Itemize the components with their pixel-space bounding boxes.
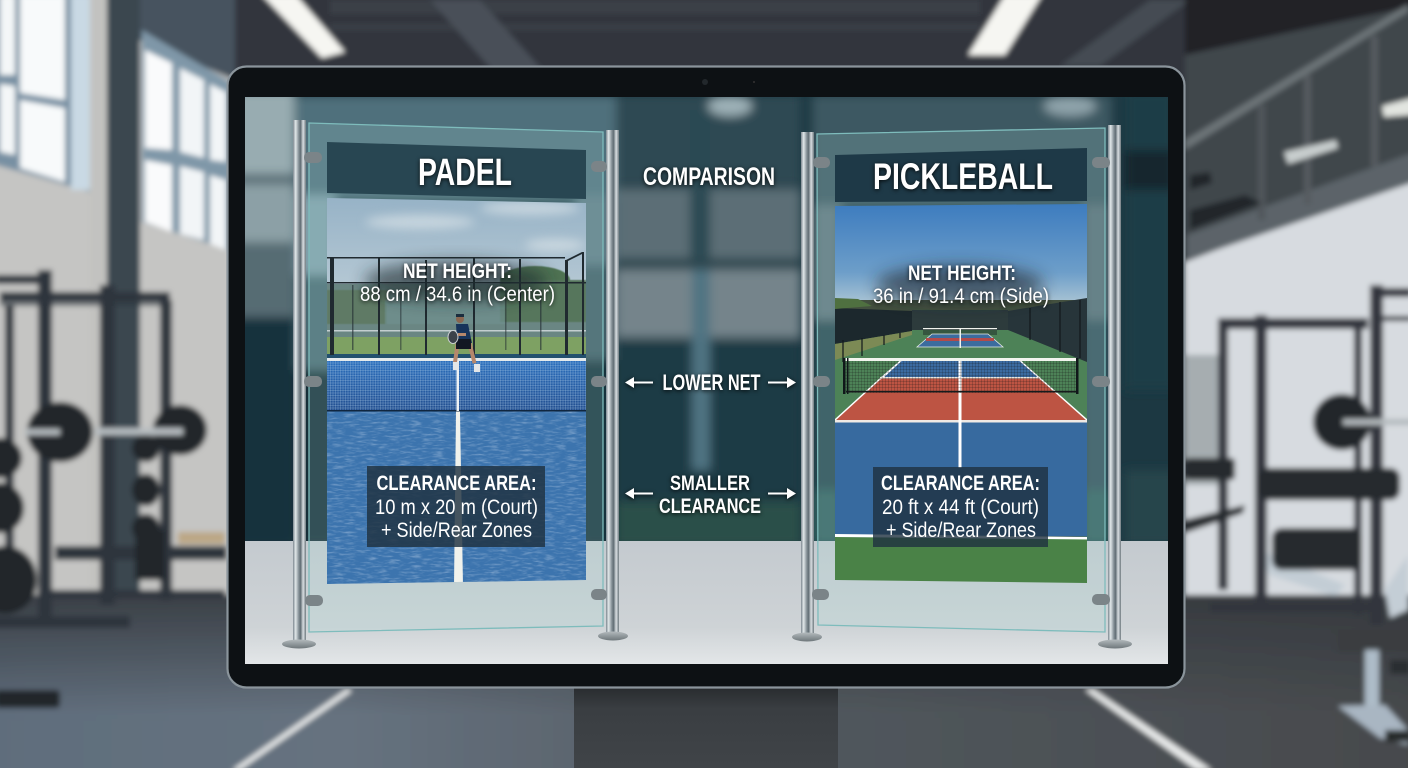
pickleball post left <box>792 132 822 642</box>
right wall and mezzanine <box>1185 0 1408 630</box>
padel clearance callout <box>367 466 545 547</box>
monitor frame <box>228 66 1184 688</box>
padel court surface <box>327 358 586 361</box>
lower net row: LOWER NET <box>662 370 761 395</box>
padel net height label: NET HEIGHT: <box>403 260 512 283</box>
pickleball net height label <box>873 262 1049 308</box>
pickleball clearance callout: + Side/Rear Zones <box>886 519 1036 542</box>
webcam <box>702 79 755 85</box>
arrow left <box>625 488 653 499</box>
pickleball net height label: 36 in / 91.4 cm (Side) <box>873 285 1049 308</box>
pickleball clamps <box>812 157 1110 605</box>
pickleball title: PICKLEBALL <box>873 156 1053 197</box>
far court <box>917 328 1003 348</box>
arrow right <box>768 377 796 388</box>
whole floor <box>0 595 1408 768</box>
left rack <box>0 270 227 628</box>
far fences <box>835 308 912 344</box>
glass pane <box>817 128 1105 632</box>
pickleball post right <box>1098 125 1132 648</box>
arrow left <box>625 377 653 388</box>
padel header bar <box>327 142 586 199</box>
right rack <box>1185 355 1218 485</box>
arrow right <box>768 488 796 499</box>
smaller clearance row: SMALLER <box>670 472 750 495</box>
pickleball clearance callout: 20 ft x 44 ft (Court) <box>882 496 1039 519</box>
pickleball clearance callout <box>873 467 1048 547</box>
net height shadow <box>876 265 1044 303</box>
padel net height label <box>360 260 555 306</box>
pickleball court photo <box>835 204 1087 585</box>
panel: comparison center column <box>625 163 796 518</box>
pickleball net height label: NET HEIGHT: <box>908 262 1016 285</box>
padel clearance callout: + Side/Rear Zones <box>381 519 532 542</box>
near court <box>881 361 1038 377</box>
net height shadow <box>364 261 548 301</box>
pickleball header bar <box>835 148 1087 202</box>
padel clearance callout: CLEARANCE AREA: <box>376 472 536 495</box>
panel: padel glass board <box>282 120 628 648</box>
player <box>448 314 480 372</box>
smaller clearance row <box>625 472 796 518</box>
padel post right <box>598 130 628 640</box>
padel clearance callout: 10 m x 20 m (Court) <box>375 496 538 519</box>
padel post left <box>282 120 316 648</box>
panel: pickleball glass board <box>792 125 1132 648</box>
padel title: PADEL <box>418 152 512 194</box>
glass pane <box>309 123 603 632</box>
padel net height label: 88 cm / 34.6 in (Center) <box>360 283 555 306</box>
comparison heading: COMPARISON <box>643 163 775 191</box>
right bench <box>1338 630 1408 652</box>
pickleball net <box>843 358 1078 394</box>
padel clamps <box>304 152 607 606</box>
monitor screen <box>235 90 1175 664</box>
smaller clearance row: CLEARANCE <box>659 495 761 518</box>
padel court photo <box>327 195 586 586</box>
pickleball clearance callout: CLEARANCE AREA: <box>881 472 1040 495</box>
monitor stand <box>574 684 838 768</box>
